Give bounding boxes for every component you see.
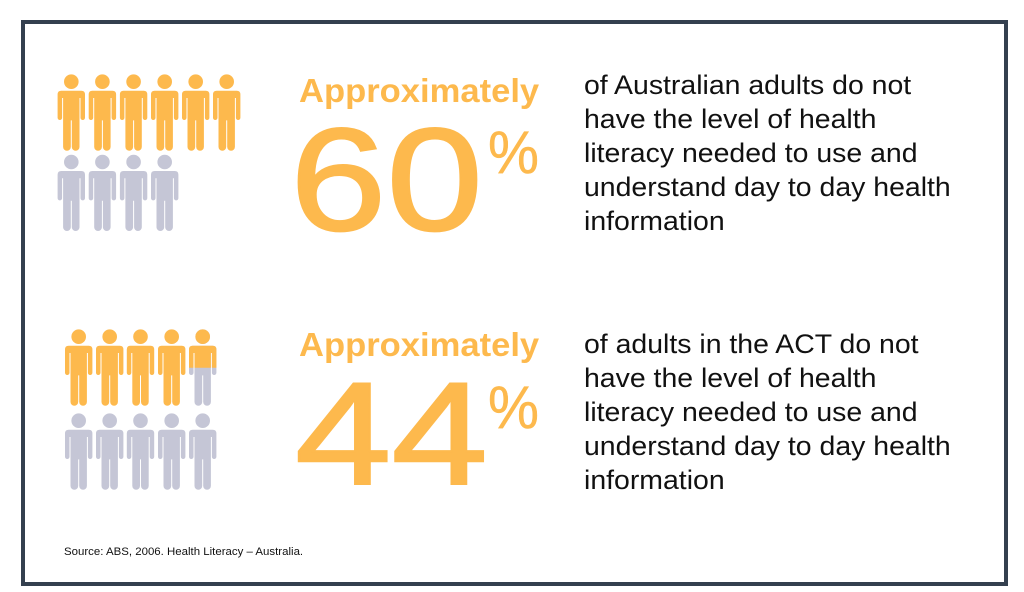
source note: Source: ABS, 2006. Health Literacy – Australia. (64, 546, 303, 558)
pictogram icons (58, 74, 240, 490)
description: Australian adults (584, 70, 951, 236)
description: Australian adults: information (584, 206, 725, 236)
pictogram: 44 percent, orange row (65, 329, 185, 406)
description: ACT adults: understand day to day health (584, 431, 951, 461)
big number: 60: 60 (290, 98, 483, 261)
heading: approximately (second): Approximately (299, 327, 539, 364)
big number: 44: 44 (295, 352, 488, 515)
description: ACT adults: have the level of health (584, 363, 876, 393)
description: ACT adults: literacy needed to use and (584, 397, 918, 427)
pictogram: 44 percent, grey row (65, 413, 216, 490)
description: ACT adults: of adults in the ACT do not (584, 329, 919, 359)
pictogram: 44 percent, partly filled figure (189, 329, 216, 406)
description: Australian adults: have the level of health (584, 104, 876, 134)
description: Australian adults: understand day to day health (584, 172, 951, 202)
description: Australian adults: literacy needed to use and (584, 138, 918, 168)
percent sign: second: % (488, 374, 539, 441)
pictogram: 60 percent, orange row (58, 74, 240, 151)
description: Australian adults: of Australian adults do not (584, 70, 911, 100)
description: ACT adults: information (584, 465, 725, 495)
description: ACT adults (584, 329, 951, 495)
heading: approximately (first): Approximately (299, 73, 539, 110)
percent sign: first: % (488, 119, 539, 186)
pictogram: 60 percent, grey row (58, 155, 178, 231)
